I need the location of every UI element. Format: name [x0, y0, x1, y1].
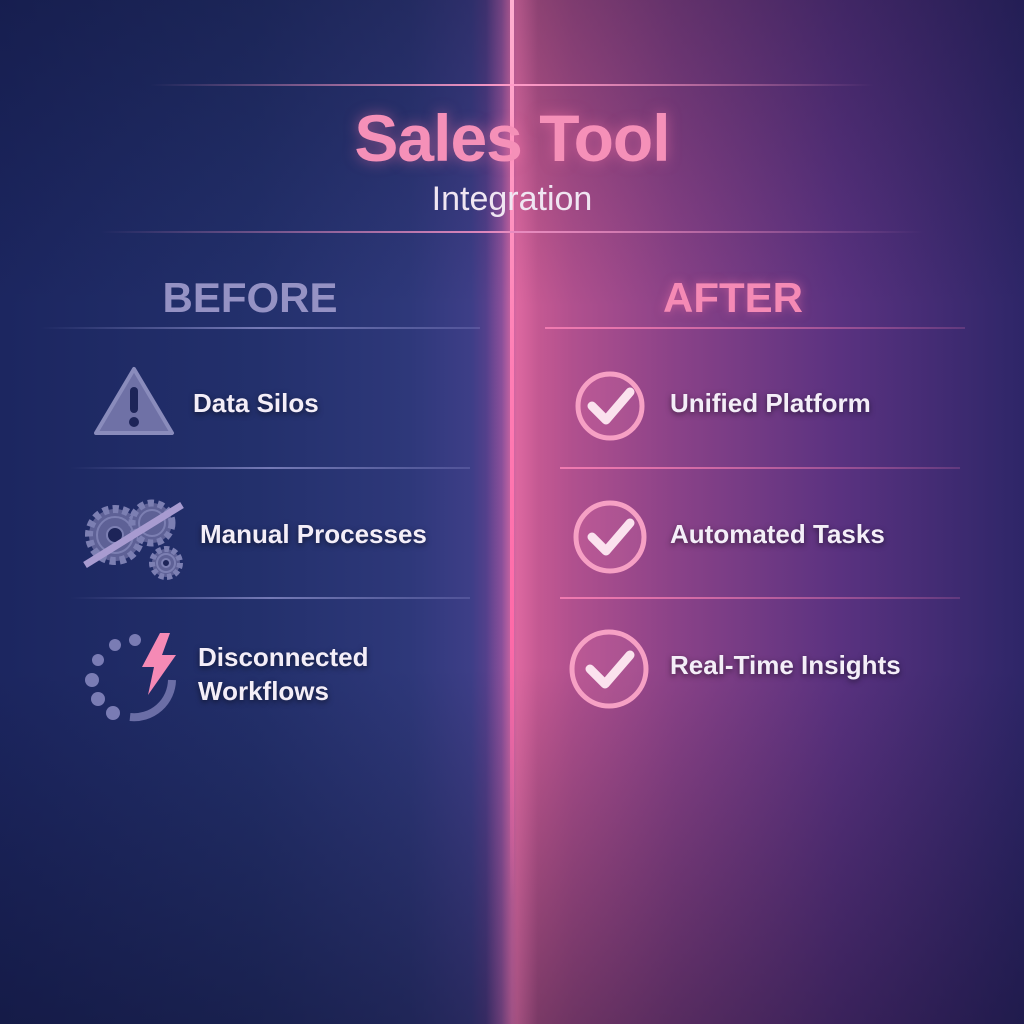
title [350, 101, 674, 218]
center glow line [486, 0, 538, 1024]
panel: before items [83, 366, 428, 722]
icon: check 2 [574, 500, 646, 574]
icon: warning triangle [94, 366, 174, 435]
icon: crossed gears [83, 500, 184, 580]
text: manual processes: Manual Processes [200, 519, 427, 549]
text: unified platform: Unified Platform [670, 388, 871, 418]
icon: check 1 [576, 372, 644, 440]
title: Sales Tool [354, 101, 670, 175]
text: data silos: Data Silos [193, 388, 319, 418]
text: disconnected workflows: Disconnected [198, 642, 368, 672]
text: disconnected workflows [196, 642, 370, 706]
title: Integration [432, 180, 592, 218]
text: real-time insights: Real-Time Insights [670, 650, 901, 680]
heading: after: AFTER [663, 274, 803, 321]
icon: check 3 [570, 630, 648, 708]
text: disconnected workflows: Workflows [198, 676, 329, 706]
panel: after items [570, 372, 902, 708]
text: automated tasks: Automated Tasks [670, 519, 885, 549]
icon: disconnected loop with bolt [85, 633, 176, 722]
heading: before: BEFORE [162, 274, 338, 321]
